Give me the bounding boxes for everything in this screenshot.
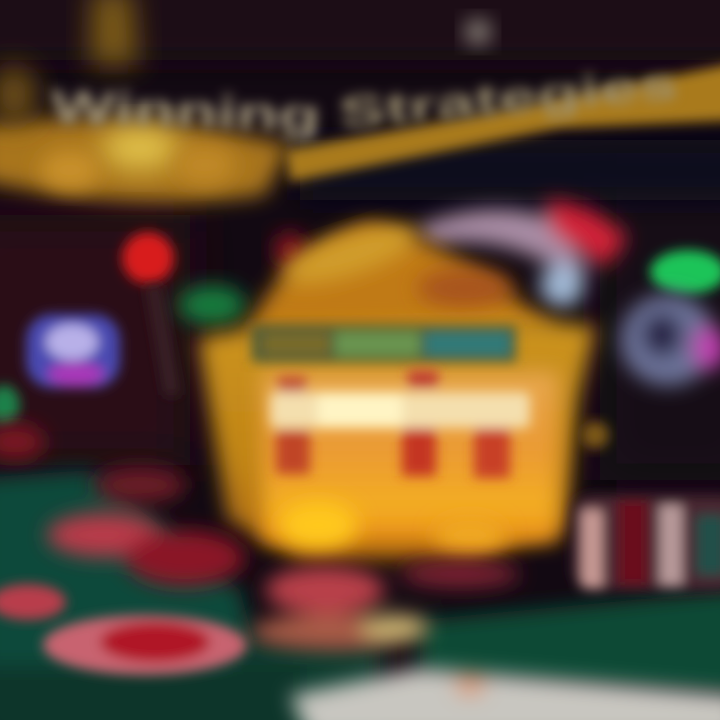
green light xyxy=(178,285,246,325)
green sign right xyxy=(650,250,720,294)
banner heading xyxy=(50,60,680,141)
neon signs xyxy=(0,232,720,460)
machine body xyxy=(198,320,596,560)
banner heading: Strategies xyxy=(337,60,680,138)
reel highlights xyxy=(270,370,530,478)
green felt table xyxy=(0,470,720,720)
machine crown xyxy=(245,222,560,335)
banner heading: Winning xyxy=(50,80,321,141)
left edge green/red glow xyxy=(0,385,20,425)
chandelier stem xyxy=(90,0,138,65)
chandelier body xyxy=(0,118,290,202)
red accent xyxy=(274,232,306,268)
red balloon light xyxy=(122,232,174,284)
poker chips xyxy=(0,467,720,675)
golden banner xyxy=(285,62,720,182)
ceiling light spot xyxy=(465,19,491,45)
display strip xyxy=(252,326,516,362)
purple sign right xyxy=(620,294,720,386)
neon arcs top right of machine xyxy=(415,200,628,307)
chips centre xyxy=(250,560,520,650)
chip left edge xyxy=(0,584,66,620)
bottom glow xyxy=(278,501,358,549)
slot machine xyxy=(198,214,609,560)
inner panel xyxy=(262,372,558,542)
purple heart sign left xyxy=(26,314,120,388)
side spikes xyxy=(581,421,609,449)
chandelier and golden sign xyxy=(0,0,720,202)
chip stack front xyxy=(43,615,247,675)
chip stack upper left xyxy=(47,467,245,586)
playing cards xyxy=(290,668,720,720)
chip stack right xyxy=(572,495,720,590)
